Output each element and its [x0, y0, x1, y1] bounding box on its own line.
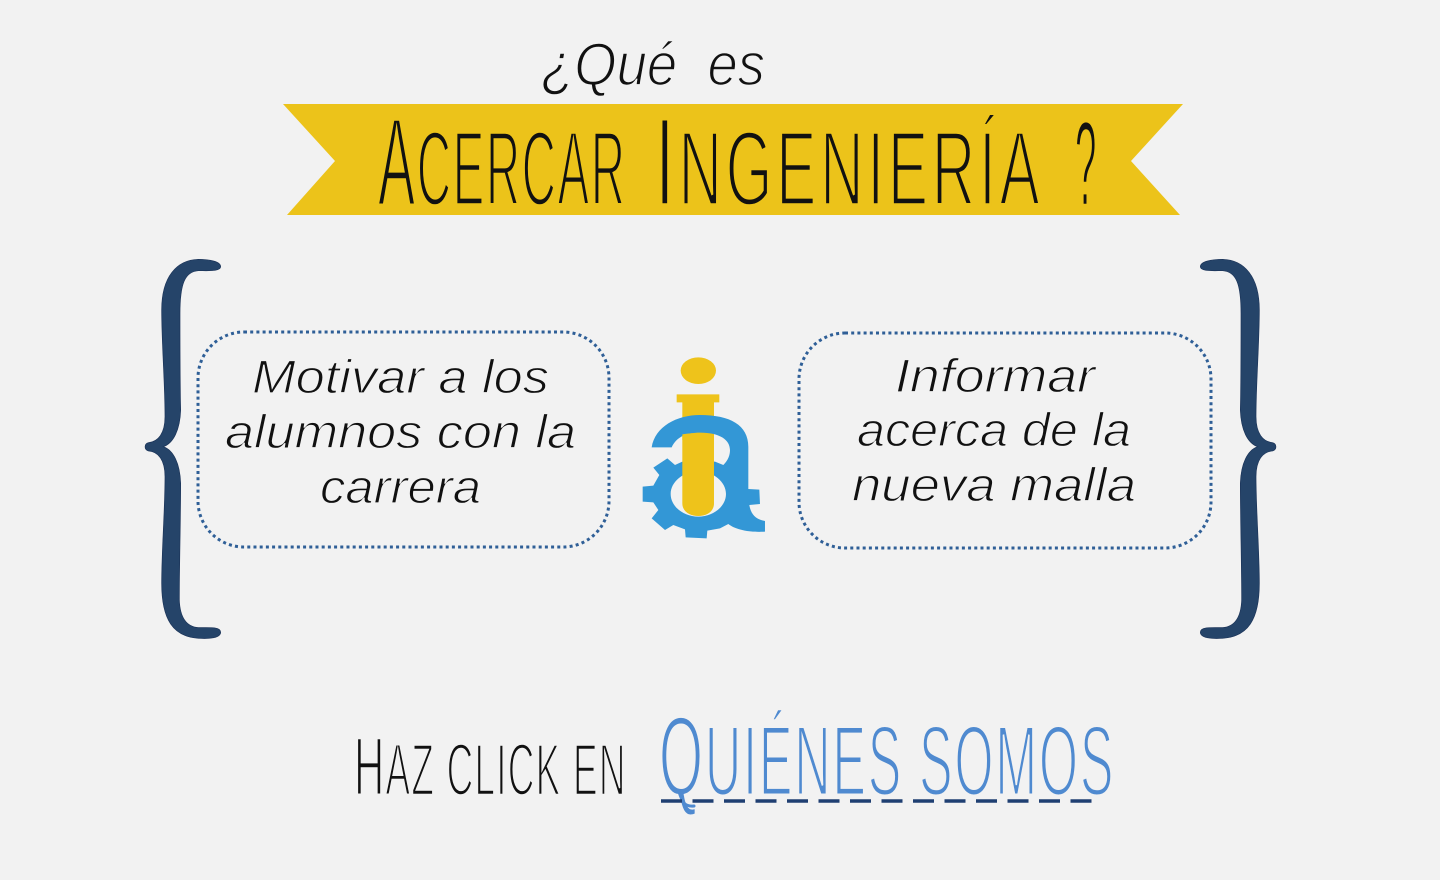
text: motivar a los alumnos con la carrera: [225, 350, 576, 513]
link: quiénes somos: QUIÉNES SOMOS: [659, 694, 1115, 819]
subtitle: ¿Qué es: ¿Qué es: [541, 31, 765, 98]
icon: acercar ingenieria logo: [643, 357, 765, 538]
banner question mark: ?: [1075, 96, 1096, 231]
text: informar acerca de la nueva malla: acerca de la: [857, 403, 1131, 456]
panel: motivar: [198, 332, 609, 547]
banner title word: Acercar: ACERCAR: [378, 91, 627, 232]
call to action: haz click en: HAZ CLICK EN: [354, 719, 627, 813]
text: motivar a los alumnos con la carrera: alumnos con la: [225, 405, 576, 458]
text: informar acerca de la nueva malla: [852, 349, 1136, 511]
text: informar acerca de la nueva malla: Informar: [895, 349, 1098, 402]
panel: informar: [799, 333, 1211, 548]
text: motivar a los alumnos con la carrera: Motivar a los: [252, 350, 549, 403]
banner title word: Ingeniería: INGENIERÍA: [655, 92, 1044, 232]
right curly brace: [1200, 259, 1276, 639]
yellow ribbon banner with title: [283, 91, 1183, 232]
text: motivar a los alumnos con la carrera: carrera: [320, 460, 481, 513]
text: informar acerca de la nueva malla: nueva malla: [852, 458, 1136, 511]
left curly brace: [145, 259, 221, 639]
